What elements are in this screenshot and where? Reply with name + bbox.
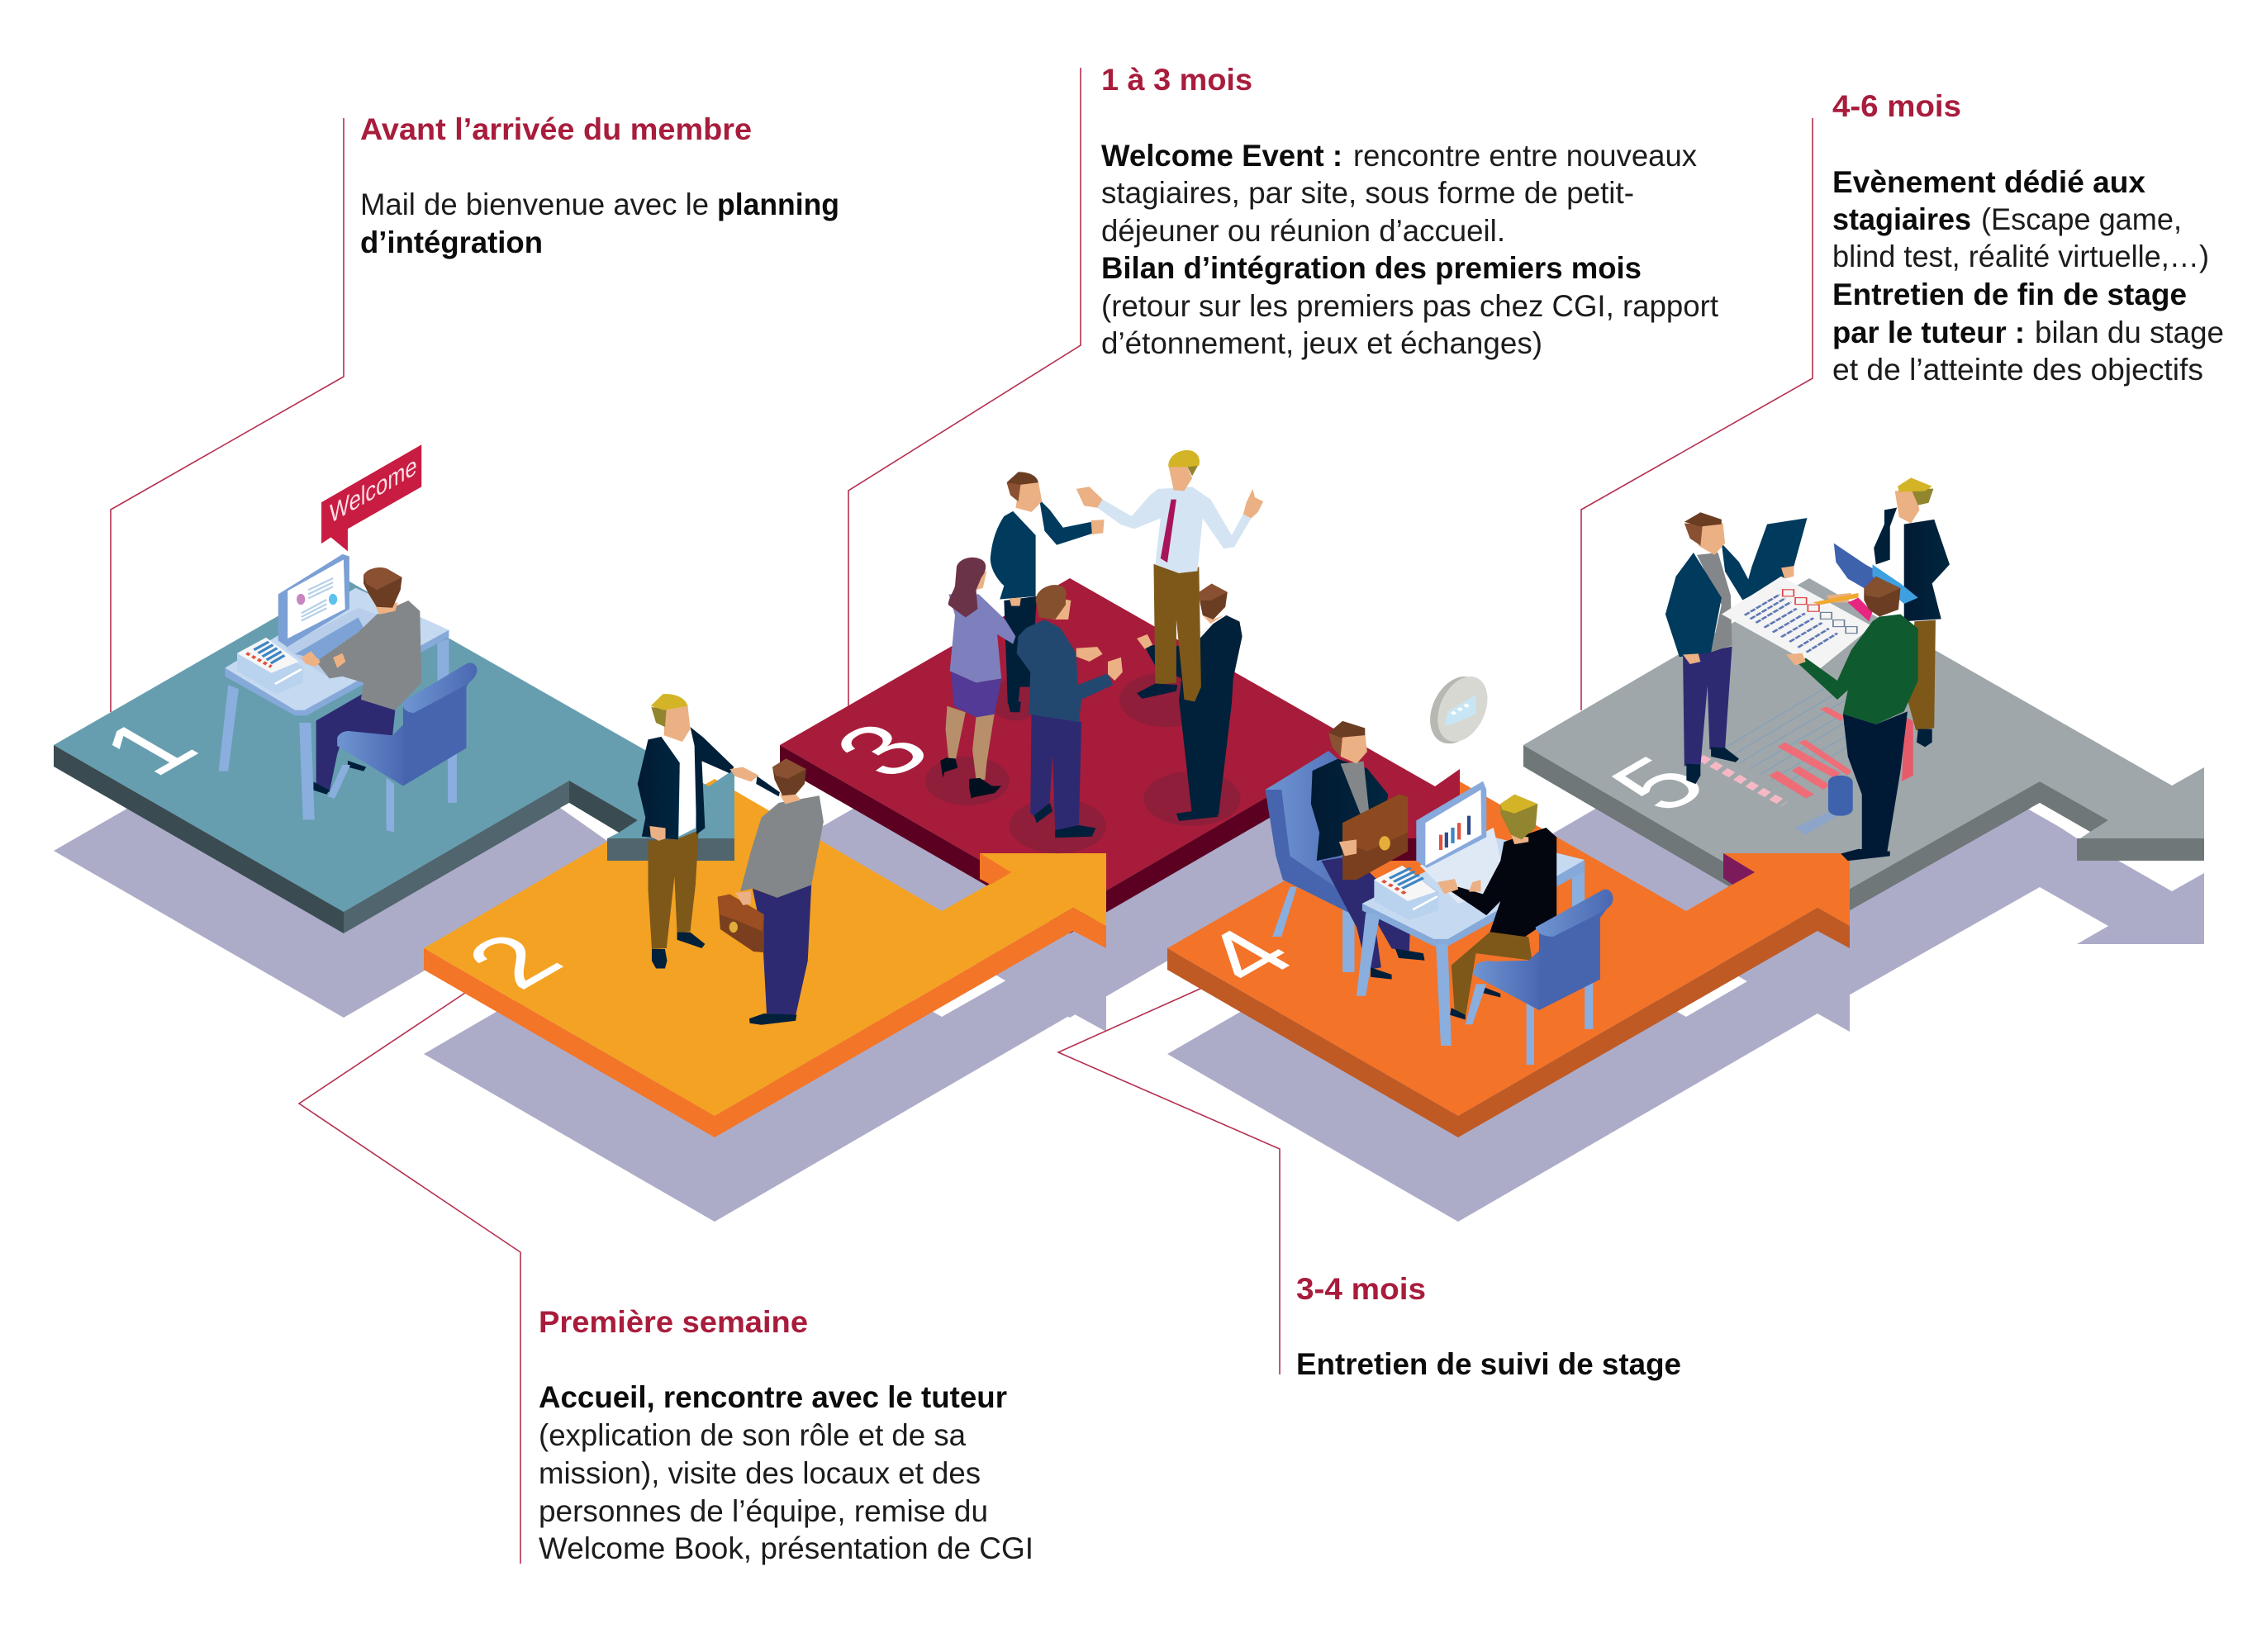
text block: 1 à 3 mois xyxy=(1101,63,1719,360)
connector line: step 2 xyxy=(299,991,520,1564)
number 5: 5 xyxy=(1585,742,1732,826)
icon: chat bubble in lens xyxy=(1422,673,1495,747)
person: man in teal jacket with folder xyxy=(1665,512,1807,784)
body: Bilan d’intégration des premiers mois xyxy=(1101,251,1642,285)
body: Welcome Event : xyxy=(1101,139,1342,173)
desk xyxy=(219,588,449,819)
person: man with briefcase xyxy=(718,758,824,1025)
platform 3: crimson arrow xyxy=(780,578,1460,933)
body: par le tuteur : xyxy=(1832,316,2025,349)
body: (retour sur les premiers pas chez CGI, rapport xyxy=(1101,289,1719,323)
platform 4: orange arrow xyxy=(1167,781,1850,1137)
body: déjeuner ou réunion d’accueil. xyxy=(1101,214,1505,248)
connector line: step 1 xyxy=(111,118,344,712)
document stack xyxy=(237,638,303,694)
body xyxy=(360,188,839,259)
illustration: review meeting at desk, step 4 xyxy=(1266,673,1613,1065)
body xyxy=(539,1380,1033,1565)
number 4: 4 xyxy=(1173,914,1319,998)
illustration: welcome event group, step 3 xyxy=(925,450,1263,853)
chair: man in black sweater xyxy=(1466,890,1613,1065)
heading: Avant l’arrivée du membre xyxy=(360,112,752,146)
connector line: step 4 xyxy=(1058,988,1280,1374)
body: (explication de son rôle et de sa xyxy=(539,1418,966,1452)
connector line: step 5 xyxy=(1581,118,1813,710)
laptop xyxy=(278,554,379,676)
floor shadows under people xyxy=(925,672,1241,853)
platform 1: teal arrow xyxy=(54,578,734,933)
chair: seated man xyxy=(1266,751,1367,972)
illustration: person at desk with laptop, step 1 xyxy=(219,444,478,833)
text block: 3-4 mois xyxy=(1296,1272,1681,1381)
body: d’intégration xyxy=(360,225,543,259)
person: seated, grey sweater xyxy=(302,567,421,795)
heading: Première semaine xyxy=(539,1305,808,1339)
heading: 4-6 mois xyxy=(1832,89,1961,123)
body: planning xyxy=(717,188,839,221)
body: mission), visite des locaux et des xyxy=(539,1456,981,1490)
person: blond man in black sweater xyxy=(1437,795,1556,1019)
body: d’étonnement, jeux et échanges) xyxy=(1101,326,1542,360)
laptop with chart xyxy=(1416,781,1508,904)
desk legs (back) xyxy=(437,638,449,687)
body: Entretien de fin de stage xyxy=(1832,278,2187,311)
platform 5: grey arrow xyxy=(1523,578,2204,933)
body xyxy=(1101,139,1719,360)
document stack xyxy=(1374,866,1438,920)
heading: 1 à 3 mois xyxy=(1101,63,1252,97)
body: et de l’atteinte des objectifs xyxy=(1832,353,2203,387)
body: Evènement dédié aux xyxy=(1832,165,2145,199)
floor chart projected on platform xyxy=(1700,689,1851,804)
number 3: 3 xyxy=(809,708,955,792)
body: (Escape game, xyxy=(1981,202,2182,236)
number 1: 1 xyxy=(75,705,221,790)
person: man in green sweater xyxy=(1786,577,1918,861)
body: Welcome Book, présentation de CGI xyxy=(539,1531,1033,1565)
chair xyxy=(328,663,478,833)
blue folder xyxy=(1834,544,1918,604)
body: Accueil, rencontre avec le tuteur xyxy=(539,1380,1007,1414)
body: bilan du stage xyxy=(2035,316,2224,349)
body: Entretien de suivi de stage xyxy=(1296,1347,1681,1381)
platform 2: amber arrow xyxy=(424,779,1106,1137)
checklist sheet xyxy=(1722,577,1872,669)
illustration: handshake, step 2 xyxy=(638,694,824,1025)
body: blind test, réalité virtuelle,…) xyxy=(1832,240,2209,273)
person: blond man xyxy=(638,694,758,968)
icon: floor marker xyxy=(1795,776,1853,835)
person: man in dark jacket, seen from behind xyxy=(1137,584,1243,821)
desk xyxy=(1357,837,1585,1046)
body: Mail de bienvenue avec le xyxy=(360,188,709,221)
body: personnes de l’équipe, remise du xyxy=(539,1494,988,1528)
person: woman in purple xyxy=(940,558,1015,799)
body: stagiaires, par site, sous forme de petit- xyxy=(1101,176,1634,210)
person: man in blue blazer xyxy=(1017,585,1123,838)
label: Welcome: Welcome xyxy=(330,449,417,529)
heading: 3-4 mois xyxy=(1296,1272,1426,1306)
person: man in teal jacket xyxy=(991,472,1105,712)
person: tall man with red tie xyxy=(1076,450,1263,701)
person: blond man in dark jacket xyxy=(1874,477,1950,781)
body: rencontre entre nouveaux xyxy=(1353,139,1697,173)
text block: 4-6 mois xyxy=(1832,89,2224,387)
body: stagiaires xyxy=(1832,202,1971,236)
body xyxy=(1832,165,2224,387)
number 2: 2 xyxy=(440,919,587,1003)
floor shadows xyxy=(54,684,2204,1222)
icon: welcome sign xyxy=(321,444,421,551)
illustration: planning review group, step 5 xyxy=(1665,477,1950,861)
person: seated man with briefcase xyxy=(1311,721,1425,980)
text block: première semaine xyxy=(539,1305,1033,1565)
connector line: step 3 xyxy=(848,68,1081,706)
text block: avant l'arrivée xyxy=(360,112,839,259)
